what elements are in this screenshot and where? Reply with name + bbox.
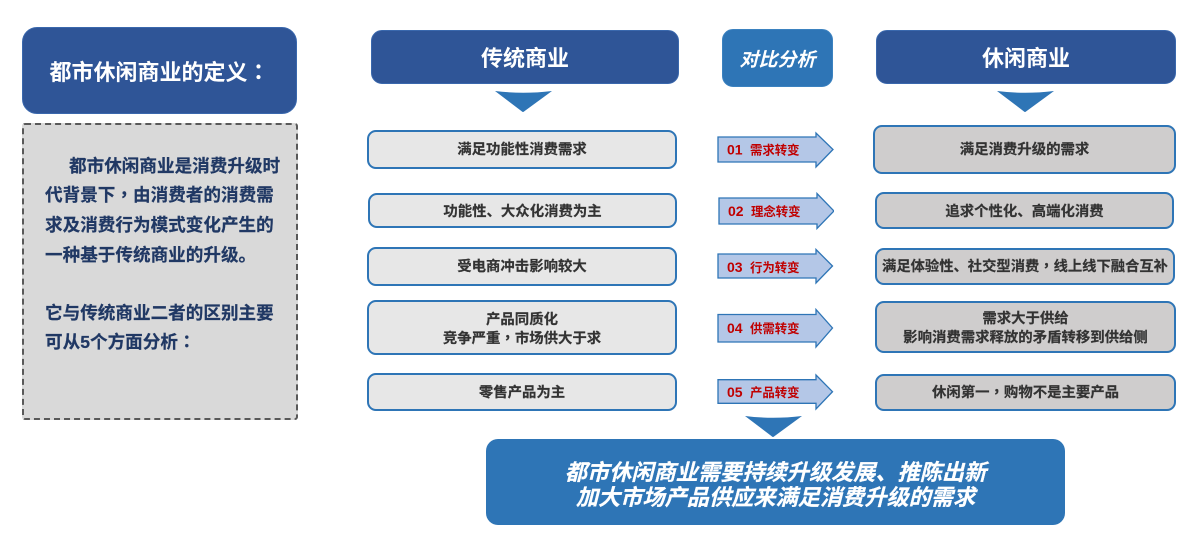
- arrow 04: [717, 308, 834, 349]
- traditional row 1: [367, 130, 677, 169]
- definition line 5: 它与传统商业二者的区别主要: [45, 303, 274, 323]
- leisure row 5: 休闲第一，购物不是主要产品: [932, 385, 1119, 401]
- definition line 4: 一种基于传统商业的升级。: [45, 245, 256, 265]
- conclusion banner: 加大市场产品供应来满足消费升级的需求: [576, 484, 975, 510]
- heading: leisure commerce: [876, 30, 1176, 84]
- arrow 02: [718, 192, 834, 230]
- leisure row 4: 影响消费需求释放的矛盾转移到供给侧: [903, 330, 1148, 346]
- traditional row 3: [367, 247, 677, 286]
- heading: comparison analysis: [722, 29, 833, 87]
- leisure row 4: 需求大于供给: [982, 311, 1069, 327]
- leisure row 5: [875, 374, 1176, 411]
- conclusion banner: [486, 439, 1065, 525]
- arrow 03: 03: [727, 259, 743, 275]
- definition heading: 都市休闲商业的定义：: [49, 60, 270, 84]
- arrow 02: 02: [728, 203, 744, 219]
- icon: down triangle right: [997, 91, 1054, 112]
- definition line 6: 可从5个方面分析：: [45, 332, 196, 352]
- leisure row 1: 满足消费升级的需求: [960, 142, 1089, 158]
- conclusion banner: 都市休闲商业需要持续升级发展、推陈出新: [565, 460, 986, 484]
- traditional row 1: 满足功能性消费需求: [457, 142, 587, 158]
- heading: traditional commerce: [371, 30, 679, 84]
- heading: comparison analysis: 对比分析: [739, 50, 816, 70]
- leisure row 2: 追求个性化、高端化消费: [945, 204, 1104, 220]
- definition line 3: 求及消费行为模式变化产生的: [45, 215, 274, 235]
- panel: definition text: [22, 123, 298, 420]
- arrow 02: 理念转变: [751, 204, 801, 219]
- arrow 03: [717, 248, 834, 284]
- leisure row 3: 满足体验性、社交型消费，线上线下融合互补: [882, 259, 1168, 275]
- arrow 04: 供需转变: [750, 321, 800, 336]
- traditional row 4: 竞争严重，市场供大于求: [443, 330, 601, 346]
- definition line 2: 代背景下，由消费者的消费需: [45, 185, 274, 205]
- arrow 04: 04: [727, 320, 743, 336]
- arrow 03: 行为转变: [750, 260, 800, 275]
- icon: down triangle left: [495, 91, 552, 112]
- heading: leisure commerce: 休闲商业: [982, 46, 1070, 71]
- leisure row 2: [875, 192, 1174, 229]
- traditional row 2: [368, 193, 677, 228]
- arrow 01: 01: [727, 142, 743, 158]
- traditional row 4: 产品同质化: [486, 312, 558, 328]
- icon: down triangle bottom: [745, 416, 802, 437]
- arrow 05: 05: [727, 384, 743, 400]
- traditional row 3: 受电商冲击影响较大: [457, 259, 587, 275]
- definition heading: [22, 27, 297, 114]
- leisure row 3: [875, 248, 1175, 285]
- arrow 01: [717, 132, 834, 168]
- arrow 05: [717, 374, 834, 410]
- leisure row 4: [875, 301, 1176, 353]
- traditional row 2: 功能性、大众化消费为主: [443, 204, 602, 220]
- heading: traditional commerce: 传统商业: [481, 46, 569, 71]
- traditional row 5: 零售产品为主: [479, 384, 565, 400]
- traditional row 4: [367, 300, 677, 355]
- leisure row 1: [873, 125, 1176, 174]
- definition line 1: 都市休闲商业是消费升级时: [69, 156, 280, 176]
- arrow 01: 需求转变: [750, 142, 800, 158]
- arrow 05: 产品转变: [750, 385, 800, 400]
- traditional row 5: [367, 373, 677, 411]
